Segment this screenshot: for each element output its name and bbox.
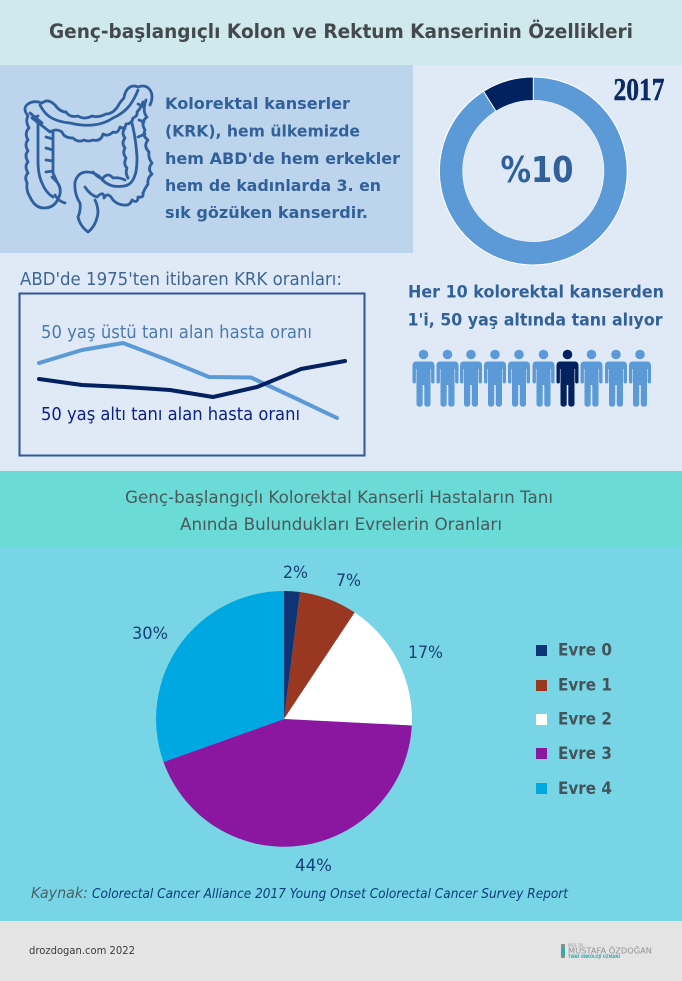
donut chart: 2017 xyxy=(439,76,628,266)
intro text: hem ABD'de hem erkekler xyxy=(165,149,400,168)
footer url: drozdogan.com 2022 xyxy=(29,944,135,957)
icon: colon xyxy=(25,86,152,232)
donut caption xyxy=(408,282,664,330)
source line: Kaynak: xyxy=(31,884,88,902)
pie percentages: 30% xyxy=(132,624,168,644)
pie percentages: 7% xyxy=(336,571,361,591)
donut caption: Her 10 kolorektal kanserden xyxy=(408,282,664,302)
legend xyxy=(536,640,612,798)
panel: pie chart section xyxy=(0,547,682,921)
line: over 50 xyxy=(39,343,337,418)
legend: Evre 3: Evre 3 xyxy=(558,744,612,763)
pie section heading xyxy=(0,471,682,547)
footer logo: TIBBİ ONKOLOJİ UZMANI xyxy=(568,953,620,960)
title banner: Genç-başlangıçlı Kolon ve Rektum Kanserinin Özellikleri xyxy=(49,19,633,43)
pie percentages: 2% xyxy=(283,563,308,583)
donut value: %10 xyxy=(500,150,574,191)
series label: over 50: 50 yaş üstü tanı alan hasta oranı xyxy=(41,323,312,343)
slice: Evre 4 xyxy=(156,591,284,762)
legend: Evre 2 xyxy=(536,710,612,728)
legend: Evre 4 xyxy=(536,779,612,798)
slice: Evre 0 xyxy=(284,591,300,719)
footer logo: PROF. DR. xyxy=(568,943,584,948)
panel: colorectal intro xyxy=(0,65,413,253)
title banner xyxy=(0,0,682,65)
pie chart xyxy=(156,591,412,847)
pie section heading: Genç-başlangıçlı Kolorektal Kanserli Hastaların Tanı xyxy=(125,488,553,508)
donut caption: 1'i, 50 yaş altında tanı alıyor xyxy=(408,310,663,330)
pie percentages: 17% xyxy=(408,643,443,663)
icon row: ten people xyxy=(412,350,651,407)
slice: Evre 3 xyxy=(164,719,412,847)
slice: Evre 2 xyxy=(284,612,412,726)
intro text xyxy=(165,94,400,222)
footer xyxy=(0,921,682,981)
legend: Evre 0: Evre 0 xyxy=(558,640,612,660)
series label: under 50: 50 yaş altı tanı alan hasta oranı xyxy=(41,405,300,425)
slice: Evre 1 xyxy=(284,592,355,719)
pie percentages xyxy=(132,563,443,876)
footer logo xyxy=(561,943,652,960)
line: under 50 xyxy=(39,361,345,397)
legend: Evre 2: Evre 2 xyxy=(558,710,612,728)
footer logo: MUSTAFA ÖZDOĞAN xyxy=(568,944,652,956)
line chart panel xyxy=(20,294,364,456)
year label: 2017 xyxy=(614,71,664,107)
intro text: hem de kadınlarda 3. en xyxy=(165,176,381,195)
legend: Evre 4: Evre 4 xyxy=(558,779,612,798)
legend: Evre 1 xyxy=(536,676,612,694)
intro text: sık gözüken kanserdir. xyxy=(165,203,368,222)
intro text: Kolorektal kanserler xyxy=(165,94,350,113)
pie percentages: 44% xyxy=(295,856,332,876)
intro text: (KRK), hem ülkemizde xyxy=(165,122,360,140)
legend: Evre 0 xyxy=(536,640,612,660)
line chart heading: ABD'de 1975'ten itibaren KRK oranları: xyxy=(20,270,342,290)
legend: Evre 1: Evre 1 xyxy=(558,676,612,694)
pie section heading: Anında Bulundukları Evrelerin Oranları xyxy=(180,515,502,535)
source line: Colorectal Cancer Alliance 2017 Young Onset Colorectal Cancer Survey Report xyxy=(92,886,569,902)
legend: Evre 3 xyxy=(536,744,612,763)
